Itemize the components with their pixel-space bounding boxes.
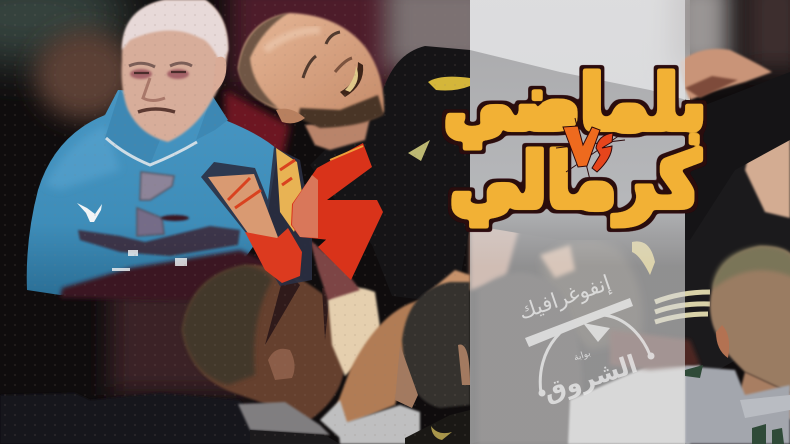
V shadow	[201, 147, 312, 286]
adidas logo	[408, 140, 430, 161]
beard	[298, 95, 384, 128]
ear	[268, 349, 295, 380]
dark haired player	[402, 282, 470, 408]
cheek highlight	[265, 30, 320, 50]
red neck under panel	[610, 330, 700, 370]
second name: كرمالي	[450, 136, 701, 226]
red neck above face	[310, 240, 360, 300]
nose	[335, 58, 352, 72]
grey jersey	[685, 366, 790, 444]
photo: Belmadi lifted by players	[238, 13, 790, 300]
title: yellow Arabic names	[444, 58, 706, 226]
drip	[265, 270, 330, 345]
raised hand	[680, 49, 772, 100]
hand behind panel	[470, 210, 520, 290]
watermark ring	[540, 315, 650, 393]
first name: بلماضي	[444, 58, 706, 148]
nose and mouth	[143, 78, 165, 100]
dark jacket right	[405, 410, 470, 444]
dark back under panel	[478, 272, 582, 444]
smile with teeth	[340, 62, 363, 97]
dark red fade	[60, 250, 285, 300]
hair	[182, 265, 272, 385]
watermark arrow	[583, 323, 610, 342]
cream face	[328, 288, 382, 376]
black jacket left	[0, 393, 270, 444]
player hair under panel	[540, 240, 642, 350]
V streaks	[228, 160, 295, 208]
splatter	[78, 215, 240, 256]
ear	[276, 109, 305, 123]
eyes and brows	[129, 63, 192, 67]
dark suit	[250, 430, 340, 444]
hands top right	[745, 135, 790, 218]
photo: players at bottom centre	[0, 0, 470, 444]
photo: Karmali in blue jacket	[27, 0, 285, 300]
watermark logo	[516, 270, 654, 408]
puma logo	[77, 203, 102, 222]
big VS graphic	[201, 143, 383, 286]
photo: players behind panel and right side	[470, 135, 790, 444]
neck	[305, 118, 370, 150]
gold collar under panel	[632, 241, 655, 275]
ring ends	[538, 352, 654, 396]
striped sleeve	[655, 292, 710, 322]
arm	[335, 300, 420, 425]
ear	[212, 57, 226, 94]
black jacket	[310, 46, 790, 300]
letter S	[291, 143, 383, 280]
V right arm	[276, 148, 304, 232]
head of player	[182, 265, 345, 420]
white zip	[106, 138, 197, 165]
watermark brand: الشروق	[540, 349, 641, 408]
grey collar	[238, 402, 330, 435]
green logo on jersey	[685, 365, 784, 444]
white shirts	[320, 400, 420, 444]
skin under panel	[540, 245, 575, 278]
lit sleeve	[45, 125, 120, 190]
short hair	[238, 13, 288, 108]
panel: translucent grey column	[470, 0, 685, 444]
letter V	[201, 147, 312, 286]
small VS badge	[556, 118, 625, 180]
white jersey	[568, 365, 700, 444]
S highlight	[330, 146, 363, 160]
sunglasses hanging	[137, 172, 174, 236]
watermark bar	[525, 298, 633, 347]
closed eyes	[303, 32, 340, 78]
head	[238, 13, 384, 125]
S body	[291, 143, 383, 280]
gold mark	[431, 426, 452, 440]
neighbour head	[710, 246, 790, 395]
S left lobe	[292, 175, 318, 238]
watermark heading: إنفوغرافيك	[516, 270, 614, 325]
head	[122, 0, 228, 142]
collar	[105, 90, 228, 165]
V bottom	[245, 228, 302, 283]
forearm far right	[425, 270, 470, 295]
dark jacket behind head right	[470, 150, 790, 444]
collar badge	[428, 77, 470, 90]
V left arm	[208, 174, 283, 282]
bald top	[122, 0, 228, 66]
his ear/cheek	[395, 344, 470, 408]
body	[27, 90, 278, 295]
watermark small label: بوابة	[573, 349, 592, 363]
